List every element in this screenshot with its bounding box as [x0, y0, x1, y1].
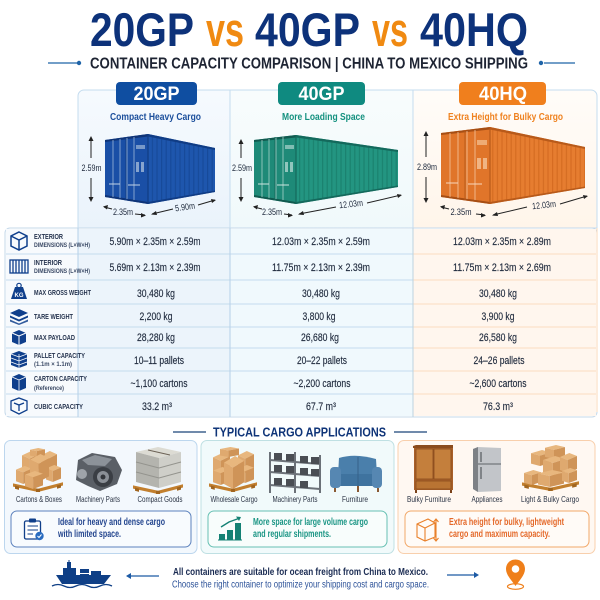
- icon: weight: KG: [14, 293, 24, 299]
- row: max payload: 26,580 kg: [479, 332, 517, 344]
- icon: location pin: [506, 560, 525, 589]
- footer text: Choose the right container to optimize your shipping cost and cargo space.: [172, 580, 429, 590]
- icon: machinery rack: [270, 452, 320, 493]
- row: carton capacity: (Reference): [34, 385, 64, 392]
- row: exterior dimensions: 12.03m × 2.35m × 2.89m: [453, 236, 551, 248]
- panel: 40GP cargo: [201, 440, 394, 554]
- icon: sofa: [330, 456, 382, 492]
- row: max payload: 26,680 kg: [301, 332, 339, 344]
- row: pallet capacity: (1.1m × 1.1m): [34, 361, 72, 368]
- dimensions: 40HQ: 2.35m: [450, 207, 472, 217]
- dimensions: 20GP: 2.35m: [113, 207, 133, 217]
- dimensions: 40HQ: 2.89m: [417, 162, 437, 172]
- row: interior dimensions: INTERIOR: [34, 258, 62, 267]
- dimensions: 40GP: 2.59m: [232, 163, 252, 173]
- row: carton capacity: CARTON CAPACITY: [34, 374, 87, 383]
- callout: 20GP: Ideal for heavy and dense cargo: [58, 517, 165, 528]
- container: 40GP: [254, 135, 398, 204]
- icon: cube: [11, 232, 27, 250]
- icon: wholesale cargo: [209, 447, 257, 492]
- icon: container interior: [10, 260, 28, 273]
- arrow: right: [447, 572, 479, 578]
- icon: cubic cube: [11, 398, 27, 414]
- panel: 40HQ cargo: Bulky Furniture: [407, 494, 451, 504]
- row: interior dimensions: 5.69m × 2.13m × 2.39m: [110, 262, 200, 274]
- title: vs: [372, 3, 408, 56]
- icon: weight: [11, 283, 27, 299]
- row: max payload: 28,280 kg: [137, 332, 175, 344]
- row: tare weight: 3,900 kg: [482, 311, 514, 323]
- title: 40HQ: [420, 3, 528, 56]
- row: carton capacity: ~2,200 cartons: [294, 378, 351, 390]
- title: 20GP: [90, 3, 194, 56]
- row: max gross weight: 30,480 kg: [479, 288, 517, 300]
- row: pallet capacity: PALLET CAPACITY: [34, 351, 85, 360]
- icon: light and bulky cargo: [522, 445, 579, 491]
- badge: 20GP: [116, 82, 197, 105]
- title: 40GP: [255, 3, 360, 56]
- arrow: left: [126, 573, 159, 579]
- row: pallet capacity: 10–11 pallets: [134, 355, 184, 367]
- row: interior dimensions: [10, 258, 551, 275]
- badge: 40GP: 40GP: [298, 84, 345, 105]
- callout: 40GP: and regular shipments.: [253, 529, 331, 540]
- row: tare weight: 2,200 kg: [140, 311, 172, 323]
- tagline: 40HQ: Extra Height for Bulky Cargo: [448, 111, 563, 123]
- panel: 40GP cargo: Machinery Parts: [272, 494, 318, 504]
- dimensions: 40GP: [232, 139, 402, 218]
- callout: 40GP: More space for large volume cargo: [253, 517, 368, 528]
- row: cubic capacity: 67.7 m³: [306, 401, 336, 413]
- row: tare weight: TARE WEIGHT: [34, 312, 73, 321]
- row: max gross weight: 30,480 kg: [302, 288, 340, 300]
- panel: 20GP header: [78, 82, 230, 228]
- icon: cargo ship: [52, 560, 112, 588]
- row: max gross weight: [11, 283, 517, 300]
- badge: 40HQ: 40HQ: [479, 84, 527, 105]
- dimensions: 20GP: 5.90m: [174, 201, 196, 213]
- dimensions: 40HQ: 12.03m: [532, 199, 556, 211]
- dimensions: 20GP: [82, 136, 216, 218]
- icon: engine: [76, 453, 122, 491]
- tagline: 40GP: More Loading Space: [282, 111, 365, 123]
- row: exterior dimensions: EXTERIOR: [34, 232, 63, 241]
- row: interior dimensions: 11.75m × 2.13m × 2.69m: [453, 262, 551, 274]
- row: cubic capacity: 76.3 m³: [483, 401, 513, 413]
- icon: compact goods: [133, 447, 183, 494]
- icon: pallet stack: [11, 351, 27, 368]
- row: max payload: MAX PAYLOAD: [34, 333, 75, 342]
- row: max gross weight: 30,480 kg: [137, 288, 175, 300]
- row: cubic capacity: 33.2 m³: [142, 401, 172, 413]
- row: max gross weight: MAX GROSS WEIGHT: [34, 288, 91, 297]
- icon: growth chart: [218, 516, 242, 540]
- tagline: 20GP: Compact Heavy Cargo: [110, 111, 201, 123]
- panel: 20GP cargo: Cartons & Boxes: [16, 494, 62, 504]
- row: pallet capacity: [11, 351, 525, 368]
- callout: 40GP: [208, 511, 387, 547]
- dimensions: 20GP: 2.59m: [82, 163, 102, 173]
- panel: 20GP cargo: [4, 440, 197, 554]
- icon: wardrobe: [413, 445, 453, 493]
- footer text: All containers are suitable for ocean freight from China to Mexico.: [173, 566, 428, 578]
- row: pallet capacity: 20–22 pallets: [297, 355, 347, 367]
- comparison table: [5, 228, 597, 417]
- row: carton capacity: [12, 374, 527, 392]
- row: tare weight: 3,800 kg: [302, 311, 336, 323]
- title: vs: [206, 3, 244, 56]
- dimensions: 40HQ: [417, 131, 588, 218]
- icon: cartons and boxes: [13, 448, 63, 492]
- row: interior dimensions: DIMENSIONS (L×W×H): [34, 268, 90, 275]
- container: 40HQ: [441, 127, 585, 204]
- panel: 20GP cargo: Machinery Parts: [76, 494, 120, 504]
- panel: 40HQ header: [413, 82, 597, 228]
- panel: 40GP cargo: Wholesale Cargo: [210, 494, 258, 504]
- icon: stacked layers: [10, 309, 28, 325]
- row: exterior dimensions: DIMENSIONS (L×W×H): [34, 242, 90, 249]
- icon: clipboard check: [24, 518, 44, 540]
- icon: box: [12, 330, 26, 345]
- badge: 20GP: 20GP: [134, 84, 180, 105]
- row: cubic capacity: CUBIC CAPACITY: [34, 402, 83, 411]
- panel: 40GP header: [230, 82, 413, 228]
- icon: carton: [12, 374, 26, 391]
- row: cubic capacity: [11, 398, 513, 414]
- badge: 40HQ: [459, 82, 546, 105]
- dimensions: 40GP: 12.03m: [339, 198, 363, 210]
- subtitle: CONTAINER CAPACITY COMPARISON | CHINA TO MEXICO SHIPPING: [90, 56, 528, 72]
- row: exterior dimensions: 5.90m × 2.35m × 2.59m: [110, 236, 200, 248]
- panel: 20GP cargo: Compact Goods: [138, 494, 182, 504]
- icon: fridge: [473, 447, 501, 492]
- row: exterior dimensions: 12.03m × 2.35m × 2.59m: [272, 236, 370, 248]
- panel: 40HQ cargo: Light & Bulky Cargo: [521, 494, 579, 504]
- row: carton capacity: ~2,600 cartons: [470, 378, 527, 390]
- row: tare weight: [10, 309, 514, 325]
- callout: 20GP: [11, 511, 191, 547]
- container: 20GP: [105, 134, 215, 204]
- panel: 40HQ cargo: Appliances: [472, 494, 502, 504]
- row: interior dimensions: 11.75m × 2.13m × 2.39m: [272, 262, 370, 274]
- footer: [52, 560, 525, 590]
- panel: 40GP cargo: Furniture: [342, 494, 368, 504]
- icon: height cube: [417, 519, 438, 541]
- footer text: [172, 566, 429, 590]
- row: carton capacity: ~1,100 cartons: [130, 378, 188, 390]
- row: pallet capacity: 24–26 pallets: [474, 355, 525, 367]
- title: [90, 3, 528, 56]
- callout: 20GP: with limited space.: [57, 529, 121, 540]
- section heading: typical cargo applications: TYPICAL CARGO APPLICATIONS: [213, 426, 386, 440]
- panel: 40HQ cargo: [398, 440, 595, 554]
- row: max payload: [12, 330, 517, 345]
- badge: 40GP: [278, 82, 365, 105]
- dimensions: 40GP: 2.35m: [262, 207, 282, 217]
- callout: 40HQ: cargo and maximum capacity.: [449, 529, 550, 540]
- row: exterior dimensions: [11, 232, 551, 250]
- callout: 40HQ: [405, 511, 589, 547]
